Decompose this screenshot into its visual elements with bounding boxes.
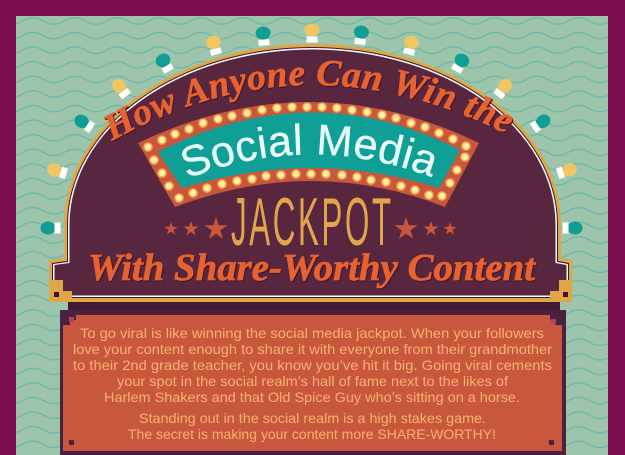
intro paragraph one: To go viral is like winning the social media jackpot. When your followers: [80, 325, 544, 341]
intro paragraph two: [128, 410, 496, 442]
corner studs: [69, 317, 556, 445]
marquee teal banner: [158, 112, 460, 188]
heading: How Anyone Can Win the: How Anyone Can Win the: [104, 60, 514, 142]
intro panel: [60, 302, 566, 455]
stars right: [395, 217, 457, 239]
heading: JACKPOT: JACKPOT: [231, 185, 391, 260]
arch sign panel: [49, 44, 572, 302]
stars left: [164, 217, 227, 239]
intro paragraph two: The secret is making your content more SHARE-WORTHY!: [128, 426, 496, 442]
heading: Social Media: Social Media: [182, 123, 434, 177]
marquee sign: [138, 102, 479, 207]
heading: With Share-Worthy Content: With Share-Worthy Content: [88, 247, 536, 289]
intro paragraph two: Standing out in the social realm is a high stakes game.: [139, 410, 486, 426]
gold corner: right: [550, 280, 572, 302]
marquee frame: [138, 102, 479, 207]
intro paragraph one: to their 2nd grade teacher, you know you’ve hit it big. Going viral cements: [73, 357, 552, 373]
intro paragraph one: love your content enough to share it with everyone from their grandmother: [73, 341, 552, 357]
intro paragraph one: [73, 325, 552, 405]
gold corner: left: [49, 280, 72, 302]
intro paragraph one: your spot in the social realm’s hall of fame next to the likes of: [117, 373, 508, 389]
string of marquee bulbs around the arch: [40, 24, 582, 234]
intro paragraph one: Harlem Shakers and that Old Spice Guy who’s sitting on a horse.: [104, 389, 520, 405]
marquee lights: [144, 103, 470, 202]
